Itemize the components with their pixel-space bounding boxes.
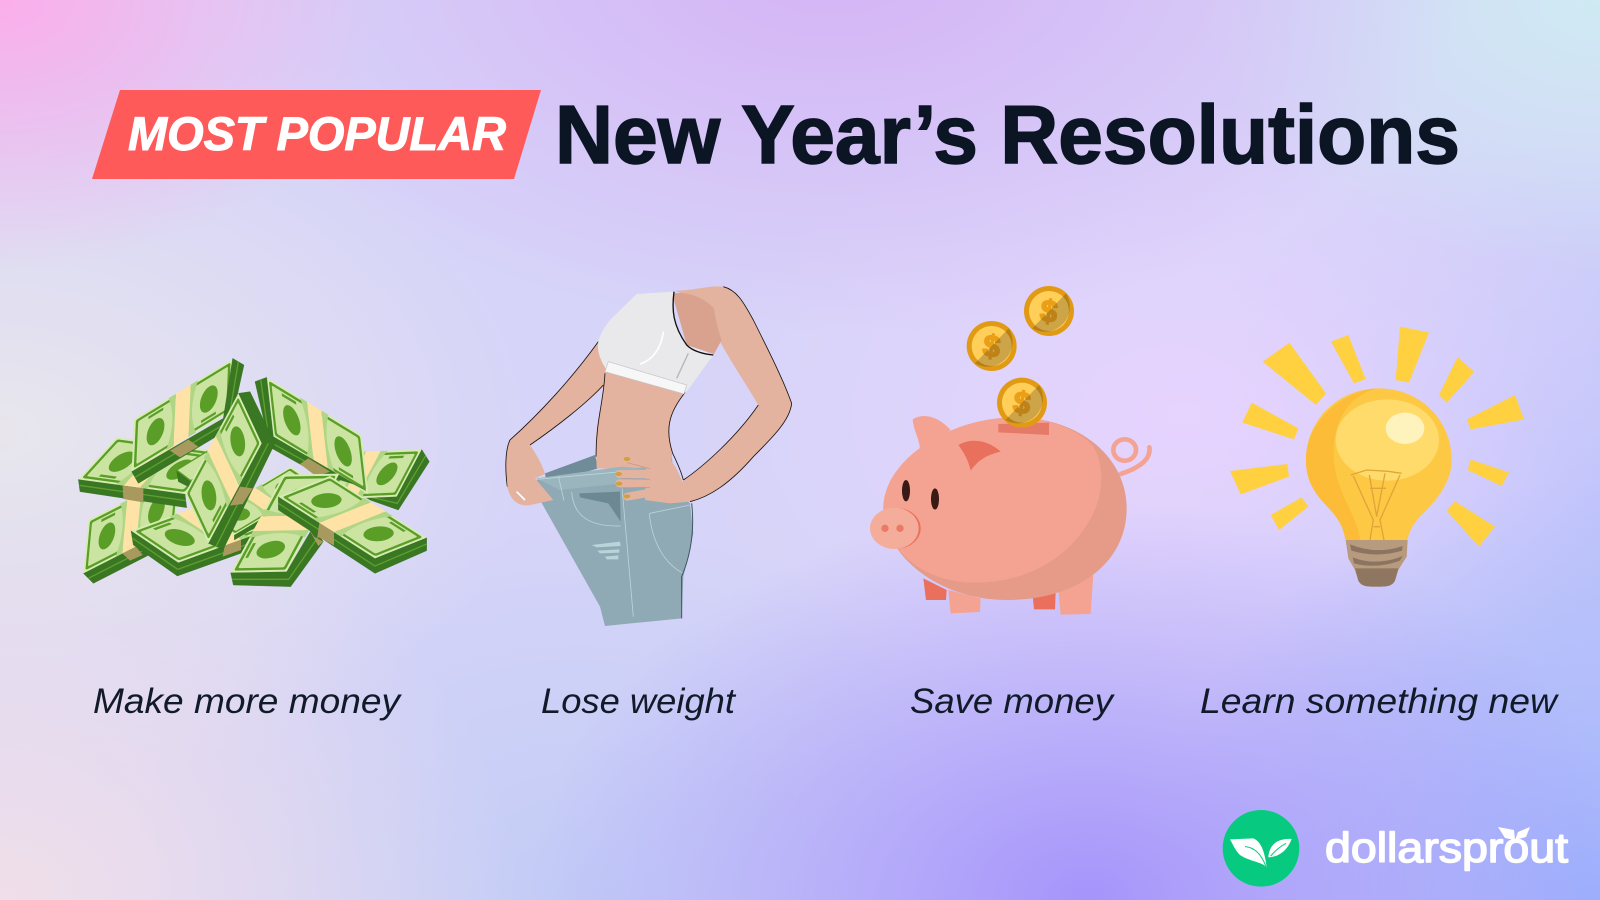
- bundle: bottom left front: [131, 491, 287, 576]
- bundle: top right: [255, 377, 368, 494]
- bundle: right behind: [300, 449, 429, 510]
- bundle: right front: [278, 476, 427, 573]
- bundle: middle behind: [208, 467, 318, 540]
- bundle: left middle: [78, 437, 223, 508]
- title banner: most popular: [92, 90, 541, 179]
- bulb base: [1346, 540, 1408, 587]
- coin over slot: [997, 378, 1047, 428]
- bundle: bottom center: [231, 474, 339, 587]
- white top: [598, 292, 713, 394]
- bundle: center tall: [185, 392, 275, 549]
- hands: [507, 443, 690, 505]
- coin left: [967, 321, 1017, 371]
- bundle: top left: [132, 358, 244, 483]
- label: make more money: Make more money: [93, 682, 403, 721]
- coin top: [1024, 286, 1074, 336]
- tail: [1113, 439, 1150, 474]
- coin left: $: [981, 329, 1002, 365]
- icon: light bulb: [1230, 327, 1524, 587]
- icon: piggy bank with coins: [870, 286, 1150, 615]
- back legs: [923, 578, 1056, 609]
- pig body: [870, 416, 1127, 600]
- jeans back piece: [657, 456, 673, 470]
- jeans: [537, 467, 693, 626]
- filament: [1351, 470, 1402, 540]
- bulb glass: [1306, 388, 1452, 540]
- logo mark: [1223, 810, 1299, 887]
- label: lose weight: Lose weight: [541, 682, 736, 721]
- rays: [1230, 327, 1524, 547]
- title: New Year's Resolutions: New Year’s Resolutions: [555, 88, 1460, 181]
- front legs: [948, 575, 1093, 615]
- torso and arms: [506, 286, 792, 505]
- coin over slot: $: [1011, 385, 1033, 421]
- bundle: small behind: [177, 452, 208, 487]
- icon: pile of money: [78, 358, 429, 587]
- label: learn something new: Learn something new: [1200, 682, 1560, 721]
- logo wordmark: dollarsprout: [1325, 824, 1568, 871]
- logo sprout leaves: [1498, 827, 1530, 840]
- coin top: $: [1038, 294, 1060, 330]
- title banner: most popular: MOST POPULAR: [128, 107, 506, 160]
- logo: dollarsprout: [1223, 810, 1568, 887]
- bundle: left bottom: [83, 473, 185, 583]
- icon: woman in oversized jeans: [506, 286, 792, 626]
- label: save money: Save money: [910, 682, 1116, 721]
- jeans back waistband: [545, 455, 598, 483]
